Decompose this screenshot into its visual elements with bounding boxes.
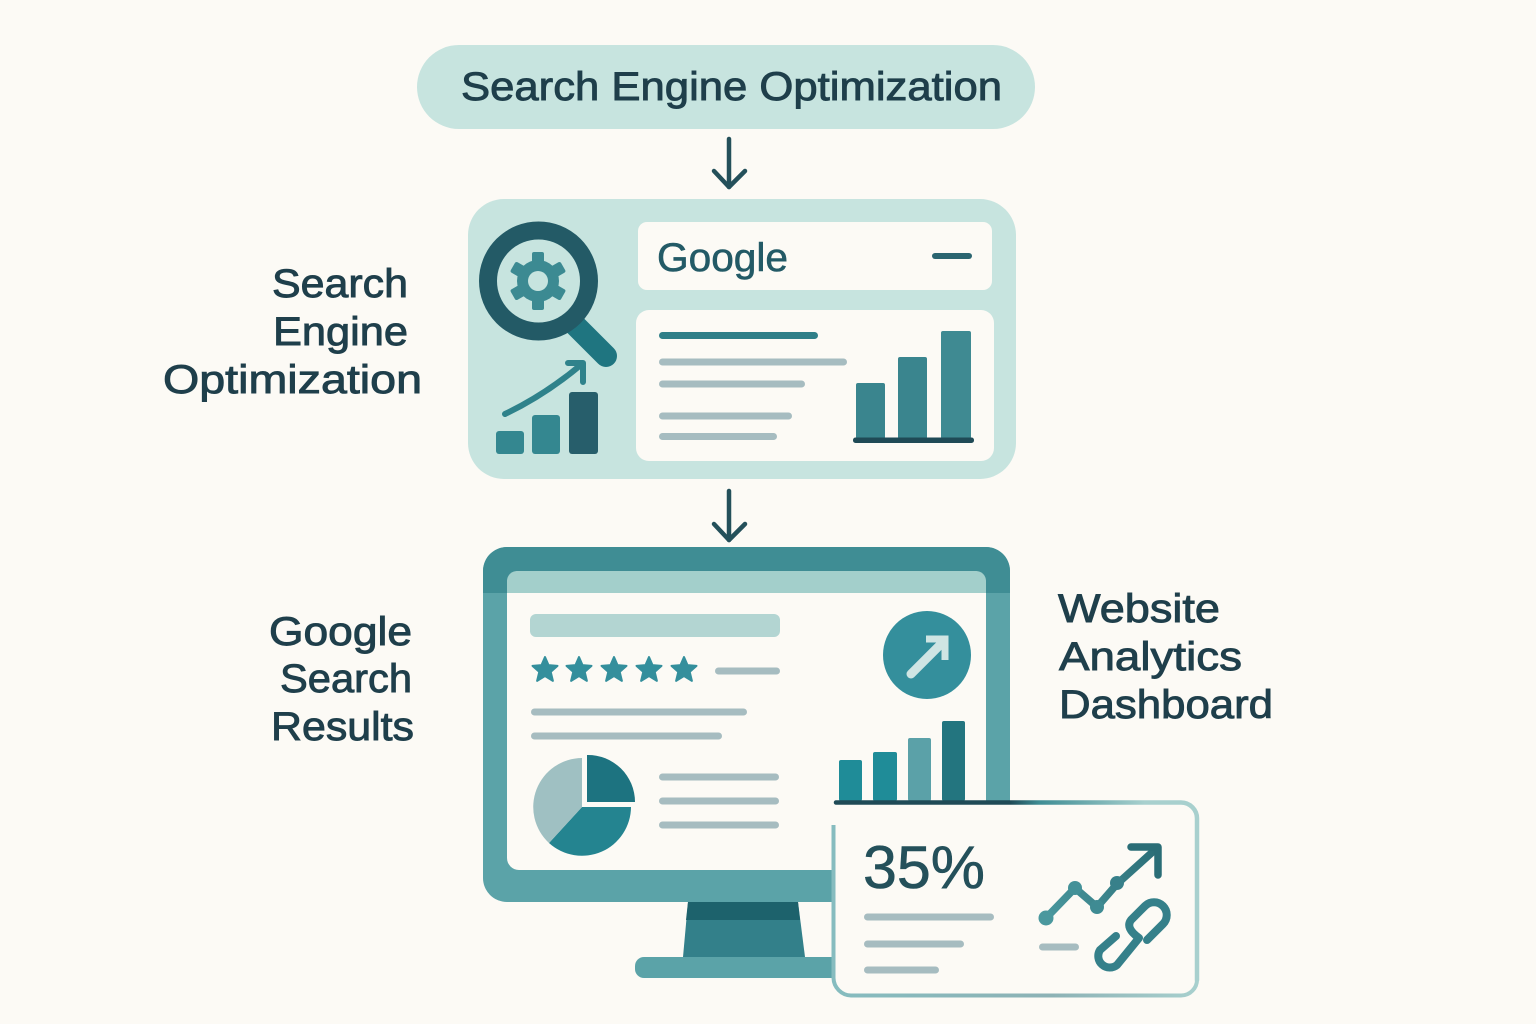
label: Google Search Results: Results [271, 705, 414, 749]
label: Search Engine Optimization: Engine [273, 310, 408, 354]
monitor screen [507, 571, 986, 870]
label: Google Search Results: Google [269, 610, 412, 654]
icon: trend circle [883, 611, 971, 699]
arrow: title to SEO panel [714, 139, 745, 187]
search result listing [530, 614, 780, 740]
stat lines [864, 914, 1079, 974]
label: Search Engine Optimization: Optimization [163, 358, 422, 402]
stats card [834, 802, 1199, 997]
small bar chart [496, 392, 598, 454]
icon: chain link [1098, 902, 1167, 968]
google search box [638, 222, 992, 290]
label: Website Analytics Dashboard [1058, 587, 1273, 727]
label: Google Search Results: Search [280, 657, 412, 701]
icon: magnifier with gear [488, 230, 606, 356]
label: Google Search Results [269, 610, 414, 749]
results card [636, 310, 994, 461]
icon: trend line arrow [1038, 847, 1158, 926]
35 percent figure: 35% [863, 834, 985, 901]
label: Search Engine Optimization [163, 262, 422, 402]
panel: SEO [468, 199, 1016, 479]
monitor frame [483, 547, 1010, 902]
dashboard bar chart [839, 721, 965, 801]
title pill [417, 45, 1035, 129]
label: Website Analytics Dashboard: Analytics [1059, 635, 1242, 679]
label: Website Analytics Dashboard: Website [1058, 587, 1220, 631]
google search box: Google [657, 236, 788, 280]
pie chart [533, 755, 635, 856]
monitor stand [635, 902, 855, 978]
label: Website Analytics Dashboard: Dashboard [1059, 683, 1273, 727]
monitor [483, 547, 1010, 978]
results bar chart [853, 331, 974, 443]
pie legend lines [659, 774, 779, 828]
arrow: SEO panel to monitor [714, 491, 745, 540]
star rating [532, 657, 696, 681]
label: Search Engine Optimization: Search [272, 262, 408, 306]
icon: growth arrow [505, 363, 583, 414]
title pill: Search Engine Optimization [461, 65, 1002, 109]
